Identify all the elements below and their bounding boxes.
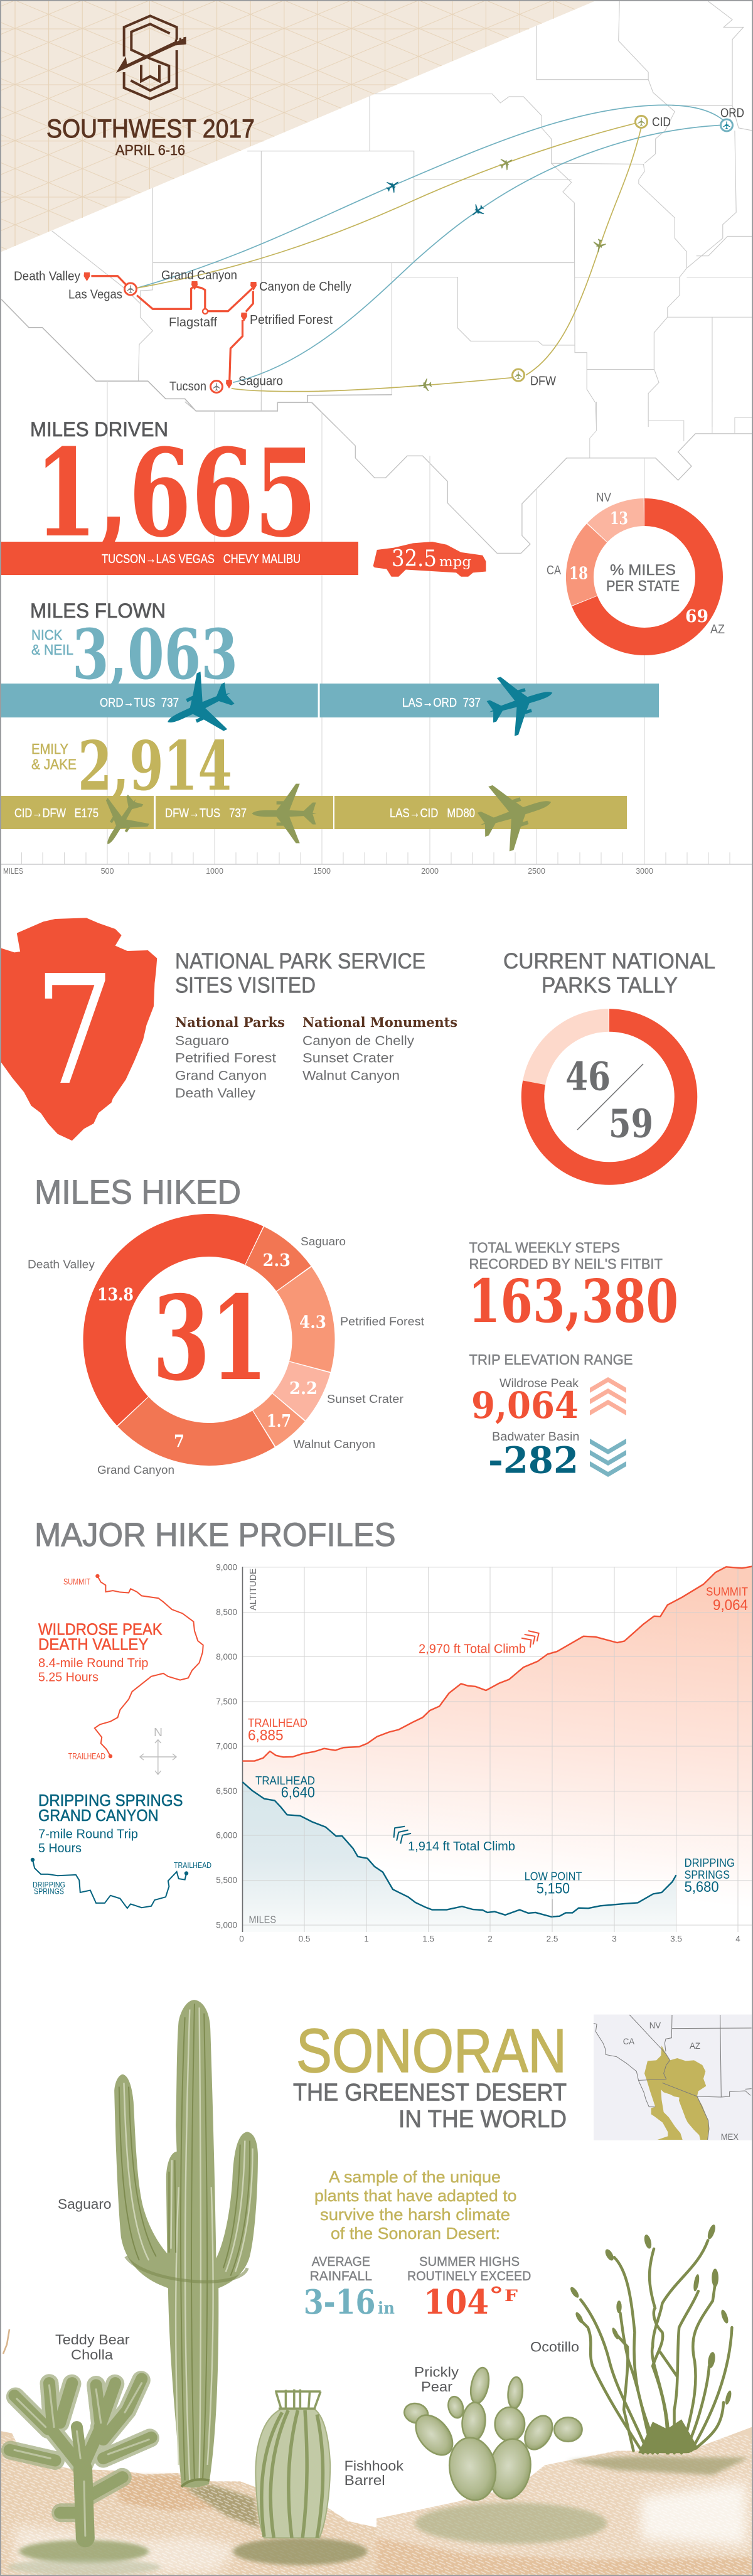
segment labels: Saguaro — [301, 1235, 346, 1248]
wildrose annotations: TRAILHEAD — [248, 1717, 307, 1729]
y axis labels: 7,500 — [216, 1697, 237, 1706]
names emily and jake: EMILY — [31, 741, 68, 757]
map labels: Death Valley — [14, 270, 80, 284]
title: SOUTHWEST 2017 — [46, 114, 255, 143]
icon: plane — [154, 664, 243, 751]
bar label: CID→DFW E175 — [14, 807, 99, 820]
donut: percent miles per state — [547, 485, 736, 668]
icon: plane — [87, 786, 157, 857]
plant labels: Cholla — [71, 2347, 114, 2363]
text block: plants intro: of the Sonoran Desert: — [331, 2224, 500, 2243]
ground right — [376, 2427, 753, 2576]
blue bars — [0, 684, 659, 717]
panel: sonoran heading: IN THE WORLD — [398, 2106, 567, 2133]
panel: national park sites: SITES VISITED — [175, 974, 316, 998]
chart: elevation profiles — [216, 1563, 753, 1943]
stat: summer highs: ROUTINELY EXCEED — [407, 2269, 531, 2284]
donut: percent miles per state: 18 — [569, 564, 588, 584]
plant labels: Saguaro — [58, 2196, 112, 2212]
donut: percent miles per state: AZ — [710, 623, 725, 636]
panel: trip elevation range: TRIP ELEVATION RANGE — [469, 1351, 633, 1368]
segment labels: Death Valley — [28, 1258, 95, 1271]
segment labels: Sunset Crater — [327, 1393, 403, 1405]
donut: percent miles per state: 13 — [610, 509, 628, 529]
panel: trip elevation range: Badwater Basin — [492, 1430, 580, 1444]
stat: average rainfall: AVERAGE — [312, 2255, 370, 2269]
number 3,063: 3,063 — [72, 614, 238, 695]
dripping springs title: DRIPPING SPRINGS — [38, 1791, 183, 1810]
segment values: 2.3 — [263, 1251, 291, 1270]
text block: plants intro: plants that have adapted to — [314, 2186, 517, 2205]
altitude label: ALTITUDE — [248, 1569, 259, 1611]
panel: miles flown: & NEIL — [31, 641, 73, 658]
panel: fitbit steps: TOTAL WEEKLY STEPS — [469, 1240, 620, 1256]
x axis labels: 2 — [488, 1935, 493, 1943]
cast shadows — [415, 2456, 749, 2544]
dripping springs annotations: 6,640 — [281, 1784, 315, 1801]
icons: route stops — [84, 115, 733, 393]
stat: summer highs: F — [505, 2287, 518, 2305]
gridlines — [242, 1567, 753, 1932]
plant labels: Ocotillo — [530, 2339, 579, 2355]
y axis labels: 7,000 — [216, 1741, 237, 1751]
heading: CURRENT NATIONAL — [503, 949, 715, 974]
panel: trip elevation range — [469, 1351, 633, 1482]
bar label: LAS→ORD 737 — [402, 696, 481, 710]
y axis labels: 6,500 — [216, 1786, 237, 1796]
mpg: 32.5 — [392, 546, 437, 572]
panel: miles driven — [0, 418, 486, 577]
x axis labels: 0 — [239, 1935, 244, 1943]
blue profile area — [242, 1782, 676, 1932]
map labels: Tucson — [169, 380, 206, 394]
panel: trip elevation range: -282 — [488, 1439, 579, 1482]
dripping springs annotations: 1,914 ft Total Climb — [408, 1840, 515, 1854]
stat: average rainfall — [304, 2255, 395, 2322]
mileage axis: MILES — [3, 867, 23, 876]
panel: fitbit steps — [468, 1240, 678, 1336]
panel: hike trail maps: GRAND CANYON — [38, 1806, 158, 1825]
icon: stray branch at left edge — [3, 2329, 9, 2354]
stat: summer highs: 104 — [424, 2283, 489, 2322]
map labels: ORD — [720, 107, 744, 121]
panel: miles flown: & JAKE — [31, 756, 77, 772]
panel: sonoran heading — [293, 2016, 567, 2133]
mileage axis: 1500 — [313, 867, 331, 876]
mileage axis: 2000 — [421, 867, 439, 876]
segment values: 1.7 — [267, 1412, 291, 1431]
x axis labels: 0.5 — [299, 1935, 310, 1943]
flight routes — [137, 105, 723, 392]
profile lines — [242, 1566, 753, 1917]
panel: national park sites: Grand Canyon — [175, 1069, 267, 1083]
big number: 1,665 — [35, 423, 317, 564]
map labels: Flagstaff — [169, 316, 217, 330]
x axis labels — [239, 1935, 740, 1943]
segment labels: Petrified Forest — [340, 1316, 424, 1328]
heading: MILES DRIVEN — [30, 418, 168, 441]
heading: MILES FLOWN — [30, 599, 166, 622]
segment labels: Walnut Canyon — [294, 1438, 375, 1451]
x axis labels: 3.5 — [670, 1935, 682, 1943]
olive bars — [0, 796, 627, 829]
subtitle: THE GREENEST DESERT — [293, 2079, 567, 2106]
panel: national park sites: Saguaro — [175, 1034, 229, 1048]
icon: plane — [252, 784, 316, 843]
donut: percent miles per state: % MILES — [610, 562, 676, 579]
donut — [61, 1192, 356, 1488]
panel: hike trail maps: SPRINGS — [34, 1886, 64, 1896]
dripping springs annotations: SPRINGS — [685, 1869, 730, 1881]
altitude axis — [242, 1567, 243, 1932]
icon: arrowhead with number 7 — [0, 918, 157, 1140]
map: sonoran desert extent: AZ — [690, 2041, 700, 2051]
miles label: MILES — [248, 1914, 276, 1926]
map: sonoran desert extent: MEX — [721, 2132, 739, 2142]
plant labels: Barrel — [344, 2472, 385, 2488]
driving route — [91, 276, 253, 380]
panel: hike trail maps: 7-mile Round Trip — [38, 1828, 138, 1842]
icon: compass: N — [154, 1726, 163, 1739]
icon: arrowhead with number 7: 7 — [35, 943, 114, 1119]
shadow of saguaro base — [181, 2479, 210, 2487]
panel: hike trail maps: 5.25 Hours — [38, 1671, 99, 1685]
y axis labels: 6,000 — [216, 1830, 237, 1840]
icon: SW logo — [116, 16, 186, 99]
panel: hike trail maps: TRAILHEAD — [68, 1751, 105, 1761]
x axis labels: 2.5 — [547, 1935, 558, 1943]
icon: down chevrons — [590, 1439, 626, 1477]
panel: miles hiked — [28, 1174, 424, 1488]
wildrose annotations: 6,885 — [248, 1727, 284, 1744]
dripping springs annotations — [255, 1774, 735, 1897]
stat: average rainfall: 3-16 — [304, 2283, 375, 2322]
icon: plane — [481, 663, 561, 741]
segment values: 2.2 — [289, 1379, 318, 1398]
map labels: DFW — [530, 375, 556, 389]
dripping springs annotations: 5,680 — [685, 1879, 719, 1896]
plant labels: Pear — [421, 2379, 452, 2395]
map: sonoran desert extent: NV — [649, 2021, 661, 2031]
map labels: Grand Canyon — [161, 269, 237, 282]
bar — [0, 542, 358, 575]
plant labels: Prickly — [414, 2364, 459, 2380]
heading: MILES HIKED — [35, 1174, 241, 1211]
panel: national park sites — [175, 949, 457, 1101]
title: SONORAN — [296, 2016, 567, 2085]
panel: hike trail maps: TRAILHEAD — [174, 1860, 211, 1870]
number 2,914: 2,914 — [78, 727, 232, 806]
mileage axis — [0, 864, 753, 876]
text block: plants intro: A sample of the unique — [329, 2167, 501, 2186]
ground left — [1, 2431, 376, 2576]
x axis labels: 4 — [735, 1935, 740, 1943]
mileage axis: 500 — [101, 867, 114, 876]
names nick and neil: NICK — [31, 626, 63, 643]
icon: plane — [470, 770, 562, 857]
donut: percent miles per state: PER STATE — [606, 577, 680, 595]
mileage axis: 1000 — [206, 867, 223, 876]
wildrose annotations: 2,970 ft Total Climb — [419, 1642, 526, 1656]
map labels: CID — [652, 115, 671, 129]
national monuments list: National Monuments — [302, 1014, 457, 1030]
plant labels: Fishhook — [344, 2458, 404, 2474]
donut — [533, 1021, 686, 1174]
illustration: saguaro — [114, 2000, 258, 2487]
red profile area — [242, 1566, 753, 1932]
dripping springs annotations: DRIPPING — [685, 1857, 735, 1869]
heading: NATIONAL PARK SERVICE — [175, 949, 425, 974]
panel: hike trail maps: DRIPPING — [33, 1880, 65, 1889]
illustration: prickly pear — [402, 2366, 582, 2504]
plant labels — [55, 2196, 579, 2488]
y axis labels — [216, 1563, 237, 1929]
center total: 31 — [152, 1270, 268, 1407]
wildrose annotations: SUMMIT — [706, 1586, 748, 1598]
map: sonoran desert extent — [594, 2015, 752, 2142]
panel: national parks tally — [503, 949, 715, 1186]
panel: title banner with grid — [0, 0, 597, 252]
stat: average rainfall: in — [378, 2299, 395, 2318]
mileage axis: 2500 — [528, 867, 545, 876]
fraction: 46 — [565, 1054, 611, 1100]
lower map borders — [185, 402, 753, 553]
panel: national park sites: Petrified Forest — [175, 1051, 276, 1066]
y axis labels: 5,500 — [216, 1876, 237, 1885]
x axis labels: 1 — [364, 1935, 369, 1943]
y axis labels: 5,000 — [216, 1921, 237, 1929]
segment labels: Grand Canyon — [97, 1464, 174, 1476]
mileage axis: 3000 — [636, 867, 653, 876]
segment labels — [28, 1235, 424, 1476]
icon: up chevrons — [590, 1377, 626, 1415]
heading: major hike profiles: MAJOR HIKE PROFILES — [35, 1516, 396, 1554]
panel: national parks tally: 59 — [609, 1101, 653, 1147]
national parks list: National Parks — [175, 1014, 285, 1030]
illustration: teddy bear cholla — [9, 2379, 151, 2538]
map labels — [14, 107, 744, 394]
panel: hike trail maps: SUMMIT — [63, 1577, 90, 1587]
y axis labels: 8,500 — [216, 1607, 237, 1617]
bar label: LAS→CID MD80 — [390, 807, 475, 820]
panel: trip elevation range: Wildrose Peak — [499, 1377, 579, 1390]
panel: fitbit steps: RECORDED BY NEIL'S FITBIT — [469, 1256, 663, 1272]
bar label: TUCSON→LAS VEGAS CHEVY MALIBU — [102, 552, 301, 566]
illustration: fishhook barrel — [255, 2390, 330, 2538]
wildrose annotations: 9,064 — [713, 1597, 748, 1614]
x axis labels: 3 — [612, 1935, 617, 1943]
panel: national parks tally: PARKS TALLY — [542, 974, 678, 998]
dripping springs annotations: LOW POINT — [525, 1870, 582, 1883]
panel: national park sites: Walnut Canyon — [302, 1069, 400, 1083]
icon: car — [373, 542, 486, 577]
panel: miles flown — [0, 599, 659, 857]
panel: national park sites: Death Valley — [175, 1087, 256, 1101]
dripping springs trail map — [33, 1860, 186, 1908]
icon: compass — [140, 1726, 176, 1774]
map labels: Saguaro — [238, 375, 283, 389]
stat: summer highs — [407, 2255, 531, 2322]
panel: national park sites: Sunset Crater — [302, 1051, 394, 1066]
wildrose annotations — [248, 1586, 748, 1744]
bar label: ORD→TUS 737 — [100, 696, 179, 710]
date: APRIL 6-16 — [115, 142, 185, 158]
text block: plants intro — [314, 2167, 517, 2243]
panel: hike trail maps — [31, 1574, 211, 1908]
panel: hike trail maps: DEATH VALLEY — [38, 1635, 148, 1654]
segment values: 4.3 — [299, 1313, 326, 1333]
donut: percent miles per state: NV — [596, 491, 612, 505]
ground hatch — [0, 2435, 753, 2576]
wildrose trail map — [95, 1576, 203, 1756]
mileage gridlines — [21, 381, 730, 864]
segment values: 13.8 — [97, 1285, 134, 1305]
illustration: ocotillo — [569, 2224, 732, 2453]
y axis labels: 8,000 — [216, 1652, 237, 1661]
donut: percent miles per state: CA — [547, 564, 562, 577]
stat: average rainfall: RAINFALL — [310, 2269, 372, 2284]
stat: summer highs: ° — [489, 2283, 504, 2308]
dripping springs annotations: TRAILHEAD — [255, 1774, 315, 1787]
segment values — [97, 1251, 326, 1452]
y axis labels: 9,000 — [216, 1563, 237, 1572]
panel: desert ground illustration — [0, 2427, 753, 2576]
plant labels: Teddy Bear — [55, 2332, 130, 2348]
donut: percent miles per state: 69 — [685, 607, 708, 626]
map labels: Las Vegas — [68, 288, 122, 302]
map labels: Canyon de Chelly — [259, 280, 351, 294]
panel: hike trail maps: 5 Hours — [38, 1842, 82, 1855]
background map of states — [1, 1, 753, 427]
bar label: DFW→TUS 737 — [165, 807, 247, 820]
panel: national park sites: Canyon de Chelly — [302, 1034, 415, 1048]
panel: hike trail maps: 8.4-mile Round Trip — [38, 1656, 148, 1670]
stat: summer highs: SUMMER HIGHS — [419, 2255, 520, 2269]
panel: miles driven: mpg — [439, 554, 471, 569]
segment values: 7 — [174, 1432, 184, 1452]
dripping springs annotations: 5,150 — [537, 1881, 570, 1897]
panel: trip elevation range: 9,064 — [471, 1384, 579, 1427]
wildrose title: WILDROSE PEAK — [38, 1619, 163, 1638]
icons: planes on routes — [383, 154, 607, 392]
map: sonoran desert extent: CA — [623, 2036, 635, 2046]
map labels: Petrified Forest — [250, 313, 333, 327]
x axis labels: 1.5 — [422, 1935, 434, 1943]
text block: plants intro: survive the harsh climate — [320, 2205, 510, 2224]
panel: fitbit steps: 163,380 — [468, 1267, 678, 1336]
